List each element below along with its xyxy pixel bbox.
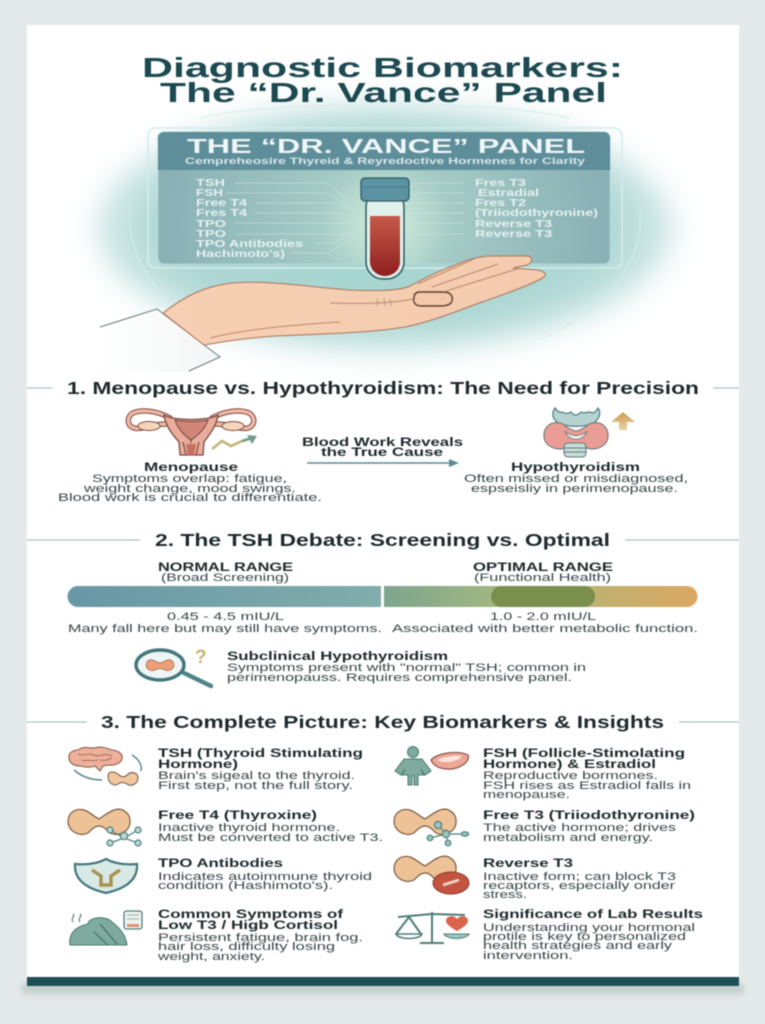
right biomarker list: Reverse T3 [475,219,552,230]
thumb [414,292,452,306]
panel subtitle: Cempreheosire Thyreid & Reyredoctive Hormenes for Clarity [185,156,585,166]
icon: uterus [128,411,254,455]
menopause label and text: Menopause [144,460,238,474]
hypothyroidism label and text: Hypothyroidism [511,460,640,474]
biomarker: Significance of Lab Results: Understanding your hormonal [483,922,695,934]
left biomarker list: Free T4 [196,198,247,209]
question mark: ? [195,647,207,668]
biomarker: Common Symptoms: Low T3 / Higb Cortisol [158,918,338,932]
biomarker: Reverse T3: Reverse T3 [483,856,573,870]
biomarker: FSH: menopause. [483,789,570,801]
icon: brain [69,747,141,785]
right biomarker list: Estradial [478,188,539,199]
biomarker: Free T4: Inactive thyroid hormone. [158,822,340,834]
hero illustration [95,103,675,372]
biomarker: TSH [69,746,363,792]
biomarker: TSH: TSH (Thyroid Stimulating [158,746,363,760]
title [142,52,623,108]
left biomarker list: TSH [196,178,225,189]
subclinical text: Symptoms present with "normal" TSH; common in [227,662,586,674]
icon: thyroid with block sign [394,856,469,894]
right biomarker list [475,178,598,240]
title: The “Dr. Vance” Panel [160,77,607,108]
hypothyroidism label and text: Often missed or misdiagnosed, [464,473,688,485]
biomarker: Common Symptoms [70,907,363,963]
orbit arcs [130,104,640,340]
blood test tube [361,178,409,279]
normal range heading: (Broad Screening) [161,572,289,584]
icon: thyroid with molecule [394,809,469,846]
callout: blood work: the True Cause [321,445,443,459]
icon: shield [75,859,137,893]
biomarker: Free T3: metabolism and energy. [483,832,653,844]
optimal range heading [473,560,613,584]
icon: thyroid with molecule [68,809,141,846]
menopause label and text: Blood work is crucial to differentiate. [58,492,322,504]
left biomarker list: Fres T4 [196,208,247,219]
hand [163,256,545,345]
optimal range values [392,611,698,635]
biomarker: TPO Antibodies [75,856,372,893]
biomarker: TSH: Brain's sigeal to the thyroid. [158,770,355,782]
biomarker: Free T4 [68,808,383,846]
biomarker: Reverse T3: Inactive form; can block T3 [483,871,676,883]
normal range heading [158,560,293,584]
optimal marker [491,586,595,607]
icon: woman and lips [395,746,468,785]
normal range heading: NORMAL RANGE [158,560,293,574]
biomarker: FSH: Hormone) & Estradiol [483,757,656,771]
footer bar [27,977,739,986]
menopause label and text [58,460,322,504]
biomarker: TPO Antibodies: condition (Hashimoto's). [158,880,333,892]
biomarker: FSH: Reproductive bormones. [483,770,658,782]
biomarker: TPO Antibodies: Indicates autoimmune thyroid [158,871,372,883]
optimal range values: Associated with better metabolic function. [392,623,698,635]
right biomarker list: Reverse T3 [475,229,552,240]
biomarker: Free T3: Free T3 (Triiodothyronine) [483,808,695,822]
normal range values: 0.45 - 4.5 mIU/L [167,611,284,623]
callout: blood work: Blood Work Reveals [302,435,463,449]
biomarker: FSH: FSH (Follicle-Stimolating [483,746,685,760]
right biomarker list: Fres T3 [475,178,526,189]
biomarker: Free T4: Must be converted to active T3. [158,832,383,844]
left biomarker list: Hachimoto's) [196,249,285,260]
right biomarker list: Fres T2 [475,198,526,209]
hypothyroidism label and text: espseisliy in perimenopause. [471,483,678,495]
glow background [95,103,675,353]
left biomarker list: FSH [196,188,223,199]
subclinical text: Subclinical Hypothyroidism [227,649,448,663]
biomarker: Significance of Lab Results: health strategies and early [483,940,672,952]
biomarker: Common Symptoms: hair loss, difficulty losing [158,941,335,953]
biomarker: TPO Antibodies: TPO Antibodies [158,856,283,870]
menopause label and text: weight change, mood swings. [83,483,296,495]
biomarker: Reverse T3: recaptors, especially onder [483,880,675,892]
icon: thyroid with larynx [544,408,608,457]
panel heading: THE “DR. VANCE” PANEL [187,136,585,158]
optimal range values: 1.0 - 2.0 mIU/L [490,611,596,623]
biomarker: TSH: Hormone) [158,757,238,771]
left biomarker list [196,178,303,260]
icon: tired person with clipboard [70,911,142,945]
title: Diagnostic Biomarkers: [142,52,623,83]
biomarker: FSH [395,746,691,801]
TSH range bar [68,586,698,607]
section 3 heading: 3. The Complete Picture: Key Biomarkers & Insights [101,712,664,732]
lab coat cuff [98,309,220,372]
biomarker: FSH: FSH rises as Estradiol falls in [483,780,691,792]
normal range values [68,611,382,635]
finger creases [210,258,520,338]
biomarker: Significance of Lab Results [396,907,703,962]
optimal range heading: OPTIMAL RANGE [473,560,613,574]
subclinical text [227,649,586,684]
hypothyroidism label and text [464,460,688,495]
subclinical text: perimenopauss. Requires comprehensive panel. [227,672,572,684]
section 1 heading: 1. Menopause vs. Hypothyroidism: The Need for Precision [67,378,699,398]
menopause label and text: Symptoms overlap: fatigue, [92,473,287,485]
glass panel [148,128,622,268]
biomarker: Common Symptoms: weight, anxiety. [157,951,265,963]
icon: magnifier with thyroid [136,647,211,686]
biomarker: Significance of Lab Results: intervention. [483,950,573,962]
optimal range heading: (Functional Health) [474,572,611,584]
left biomarker list: TPO Antibodies [196,239,303,250]
icon: balance scale with heart [396,912,469,943]
icon: rising trend arrow [212,435,257,449]
left biomarker list: TPO [196,219,226,230]
biomarker: Common Symptoms: Common Symptoms of [158,907,344,921]
biomarker: Reverse T3: stress. [483,889,527,901]
biomarker: Free T3 [394,808,695,846]
normal range values: Many fall here but may still have symptoms. [68,623,382,635]
biomarker: TSH: First step, not the full story. [158,780,353,792]
biomarker: Free T3: The active hormone; drives [483,822,676,834]
callout: blood work [302,435,463,467]
biomarker: Free T4: Free T4 (Thyroxine) [158,808,317,822]
right biomarker list: (Triiodothyronine) [475,208,598,219]
connector lines [226,183,465,253]
biomarker: Significance of Lab Results: Significance of Lab Results [483,907,703,921]
biomarker: Common Symptoms: Persistent fatigue, brain fog. [158,932,363,944]
biomarker: Significance of Lab Results: protile is key to personalized [483,931,686,943]
left biomarker list: TPO [196,229,226,240]
icon: up arrow [611,412,635,430]
biomarker: Reverse T3 [394,856,676,901]
arrow [307,459,459,467]
section 2 heading: 2. The TSH Debate: Screening vs. Optimal [155,530,610,550]
